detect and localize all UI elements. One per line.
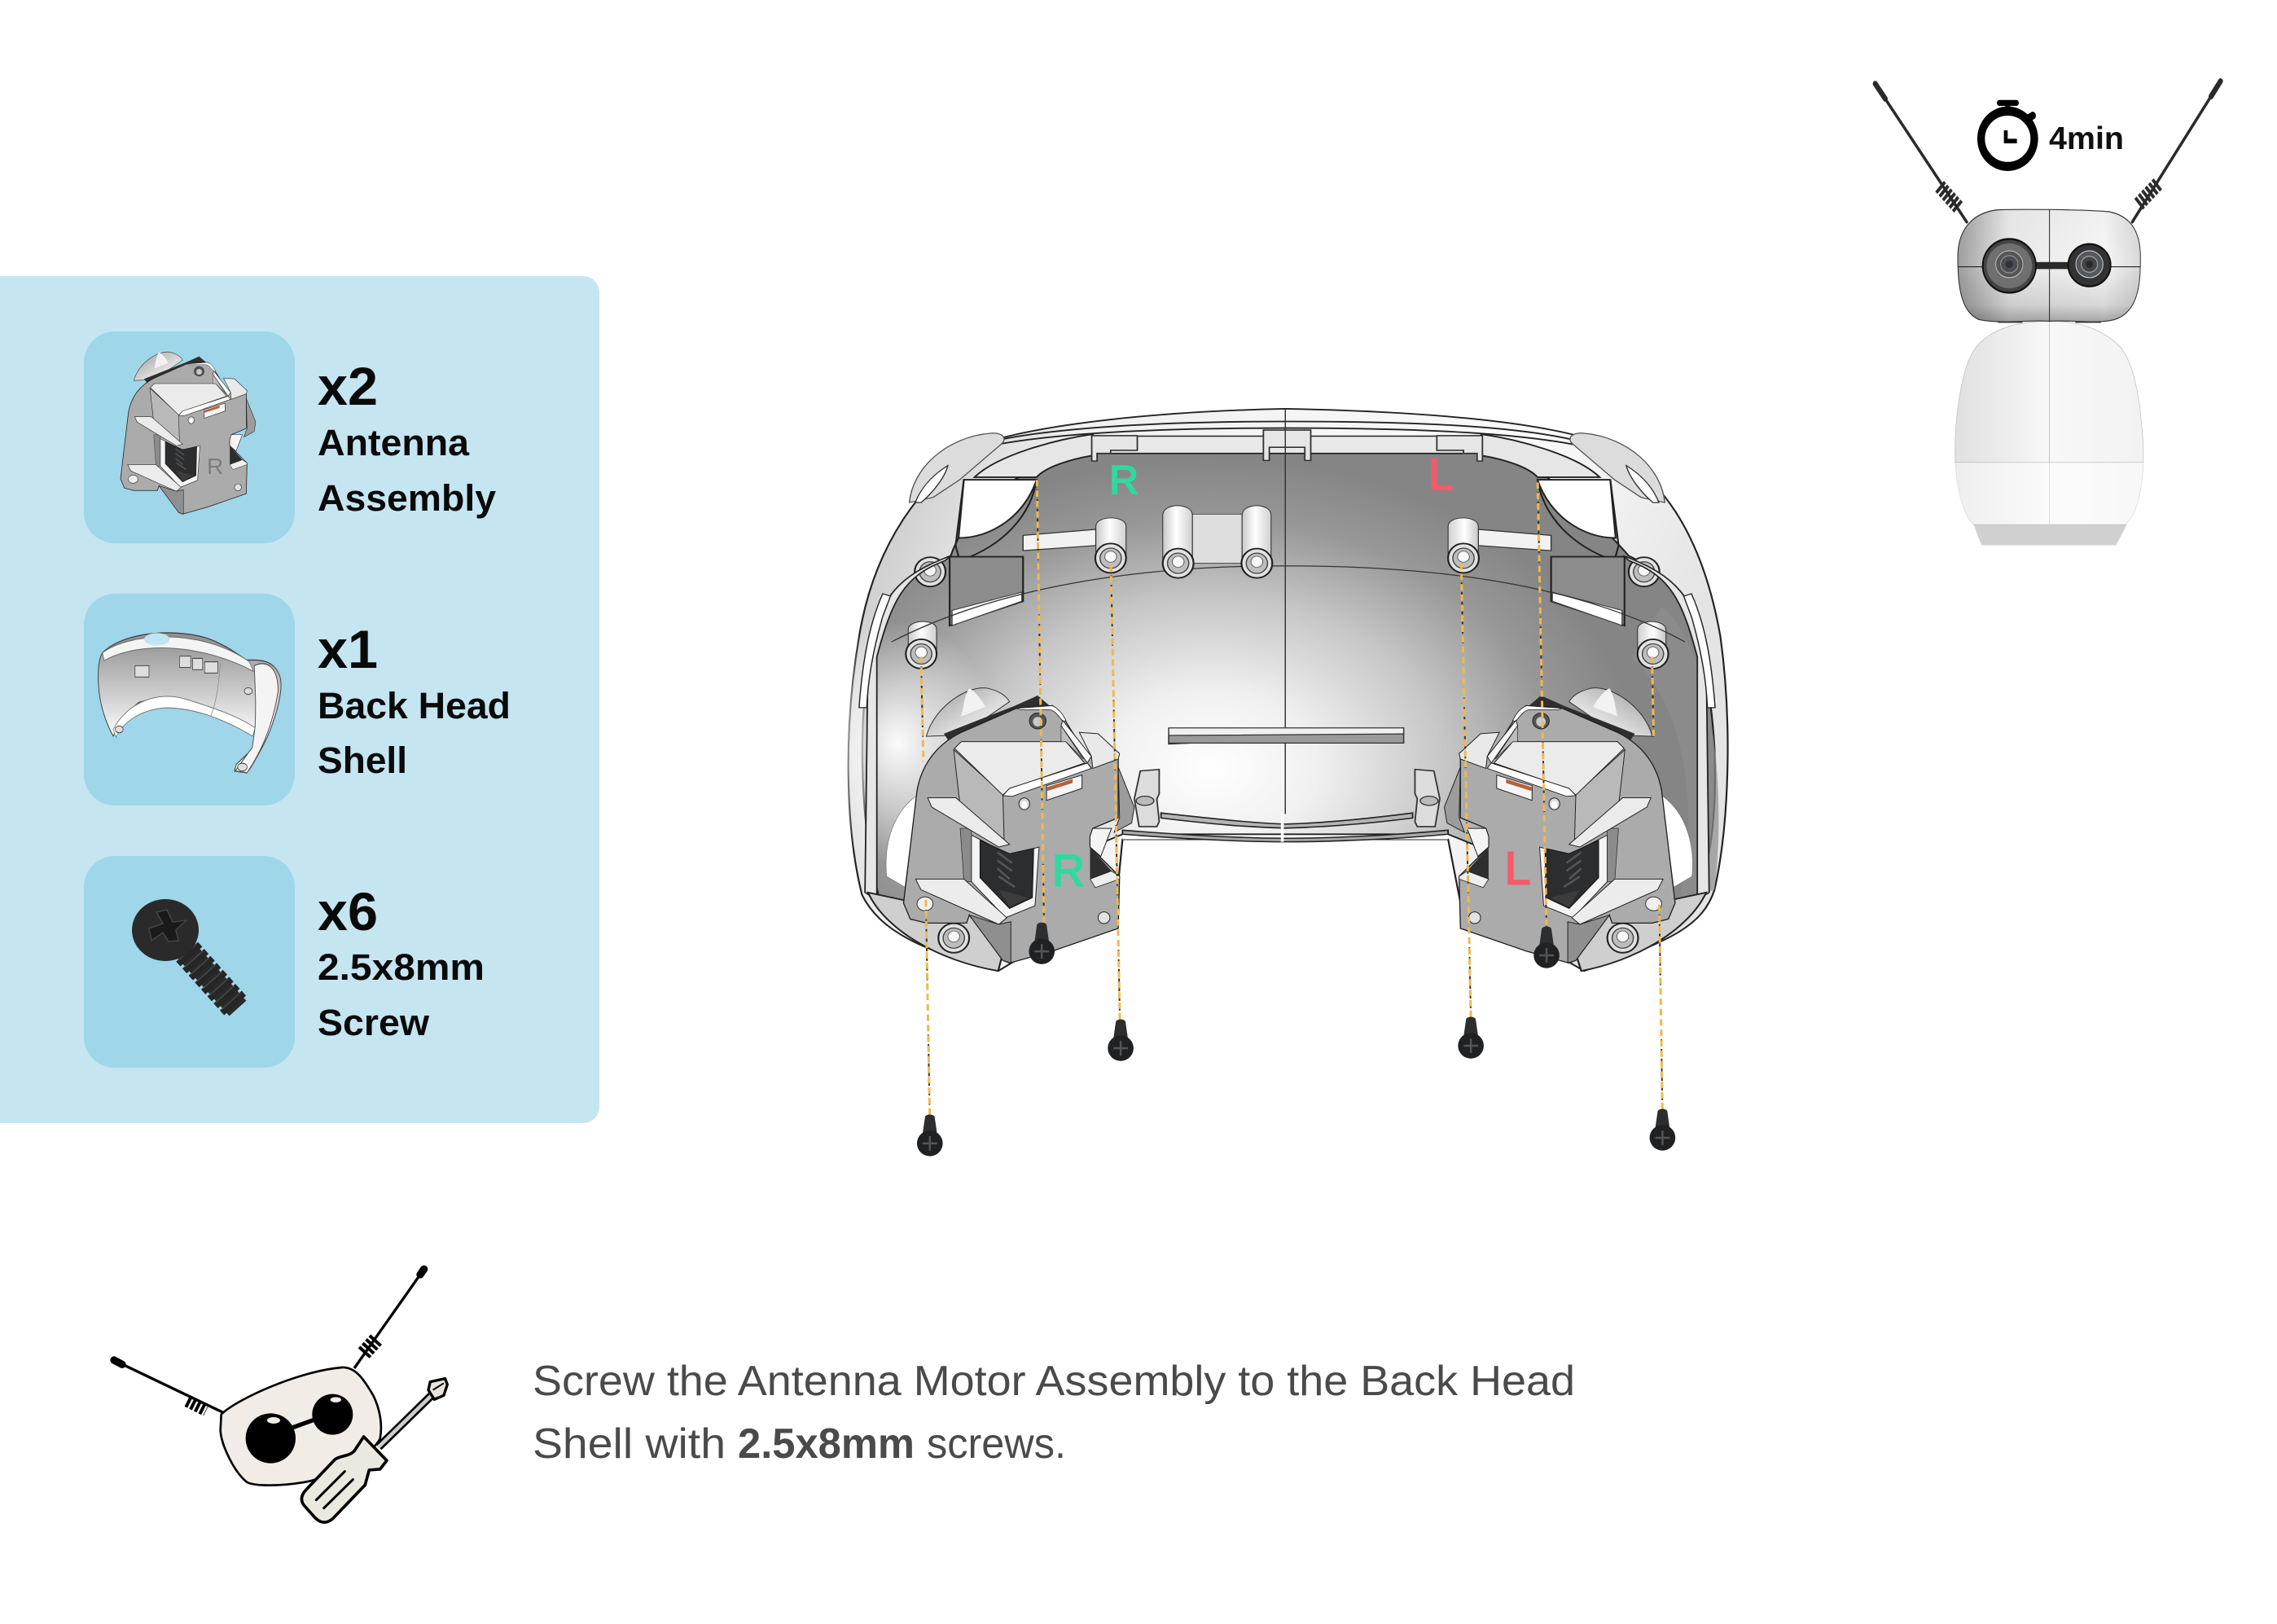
lower rim right [1567,893,1706,971]
left eye [1983,239,2036,292]
label: L on shell: L [1428,449,1454,499]
part label: x1 Back Head Shell: x1 [318,619,378,679]
shell right side details [1415,433,1715,900]
label: R on shell: R [1109,458,1138,503]
icon: back head shell [99,633,281,773]
icon: antenna assembly [121,352,256,514]
part label: x6 2.5x8mm Screw: x6 [318,881,378,941]
screwdriver [301,1379,447,1522]
antenna right [354,1269,424,1368]
antenna left [114,1360,222,1412]
guide lines [921,480,1662,1121]
antennas [1876,81,2221,222]
central standoffs [1163,506,1272,578]
icon: mascot with screwdriver [114,1269,447,1522]
part label: x2 Antenna Assembly [318,356,496,519]
robot thumbnail [1876,81,2221,545]
shell left side details [859,433,1159,900]
part label: x2 Antenna Assembly: Antenna [318,422,470,463]
lower rim left [868,893,1010,971]
instruction text: Screw the Antenna Motor Assembly to the Back Head [533,1358,1575,1405]
panel: parts list [0,276,599,1123]
icon: antenna assembly: R [207,454,223,479]
antenna assembly: L [1445,688,1692,963]
base [1973,525,2127,546]
part label: x2 Antenna Assembly: Assembly [318,477,496,519]
head [221,1367,381,1486]
part tile: screw [84,856,295,1068]
part label: x6 2.5x8mm Screw: Screw [318,1002,430,1043]
diagram: back head shell with antenna assemblies [797,409,1728,1157]
instruction text: 2.5x8mm [738,1420,915,1468]
right eye [2069,244,2111,287]
part tile: antenna assembly [84,331,295,543]
instruction text [533,1358,1575,1468]
central slot [1169,728,1404,744]
icon: screw [132,899,238,1008]
part label: x1 Back Head Shell: Shell [318,740,407,781]
instruction text: screws. [927,1420,1066,1468]
outer shell [849,409,1728,971]
part label: x1 Back Head Shell: Back Head [318,685,511,726]
part label: x6 2.5x8mm Screw: 2.5x8mm [318,946,485,988]
seams [892,409,1685,814]
screws [917,923,1675,1157]
part label: x6 2.5x8mm Screw [318,881,485,1043]
part tile: back head shell [84,594,295,805]
head [1958,209,2140,323]
time label: 4min [2049,121,2124,156]
label: R on assembly: R [1052,845,1085,896]
part label: x1 Back Head Shell [318,619,511,781]
part label: x2 Antenna Assembly: x2 [318,356,378,416]
top band [1093,437,1484,454]
instruction text: Shell with [533,1420,726,1468]
lower rim [1122,813,1448,842]
inner cavity [862,454,1715,925]
antenna assembly: R [886,688,1134,963]
body [1955,321,2143,525]
icon: stopwatch [1981,103,2034,166]
label: L on assembly: L [1505,843,1531,895]
eyes [246,1394,353,1464]
shell body [797,409,1728,971]
